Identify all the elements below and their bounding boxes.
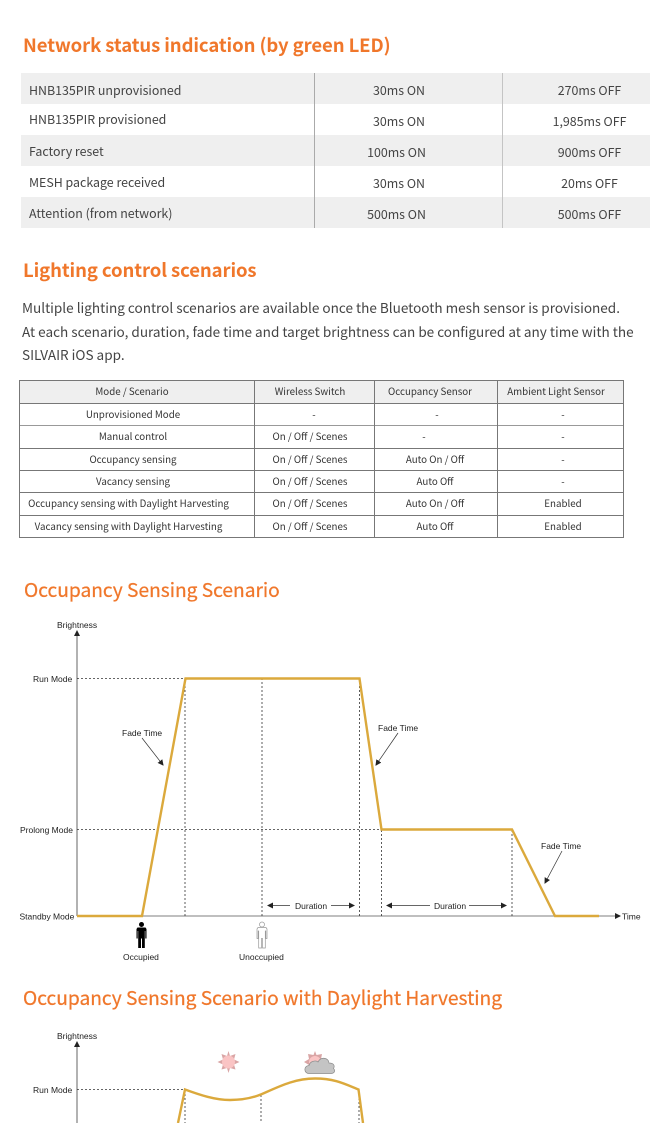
table: modes and scenarios: On / Off / Scenes <box>273 519 347 533</box>
axis labels <box>20 620 641 922</box>
table: modes and scenarios: Mode / Scenario <box>95 384 169 398</box>
table: network status indication: 100ms ON <box>367 143 426 161</box>
table: modes and scenarios: Occupancy sensing with Daylight Harvesting <box>28 496 229 510</box>
table: network status indication: Factory reset <box>29 142 104 160</box>
heading: network status: Network status indication (by green LED) <box>23 32 390 58</box>
fade time annotations <box>122 723 581 883</box>
table: network status indication <box>21 73 650 228</box>
table: modes and scenarios: On / Off / Scenes <box>273 474 347 488</box>
paragraph: scenarios description: Multiple lighting control scenarios are available once the Bluetooth mesh sensor is provisioned. <box>22 297 620 317</box>
chart: occupancy sensing scenario <box>20 620 641 962</box>
axis labels: Time <box>622 912 641 922</box>
table: network status indication: 30ms ON <box>373 112 425 130</box>
table: modes and scenarios: - <box>312 407 316 421</box>
table: network status indication: 1,985ms OFF <box>553 112 626 130</box>
brightness curve <box>77 678 599 916</box>
heading: daylight harvesting scenario: Occupancy Sensing Scenario with Daylight Harvesting <box>23 983 502 1011</box>
table: modes and scenarios: - <box>561 429 565 443</box>
icon: unoccupied person <box>239 922 284 962</box>
table: network status indication: 30ms ON <box>373 81 425 99</box>
table: modes and scenarios: Enabled <box>544 519 582 533</box>
paragraph: scenarios description: SILVAIR iOS app. <box>22 344 125 364</box>
table: modes and scenarios: Auto On / Off <box>406 452 464 466</box>
axis labels: Standby Mode <box>20 912 75 922</box>
table: modes and scenarios: - <box>561 407 565 421</box>
table: network status indication: 30ms ON <box>373 174 425 192</box>
table: modes and scenarios: On / Off / Scenes <box>273 429 347 443</box>
table: modes and scenarios <box>19 380 624 538</box>
heading: occupancy sensing scenario: Occupancy Sensing Scenario <box>24 575 280 603</box>
duration annotations: Duration <box>434 901 466 911</box>
table: modes and scenarios: Auto Off <box>417 519 453 533</box>
table: network status indication: Attention (from network) <box>29 204 172 222</box>
icon: unoccupied person: Unoccupied <box>239 952 284 962</box>
paragraph: scenarios description <box>22 297 634 364</box>
icon: occupied person <box>123 922 159 962</box>
axis labels: Brightness <box>57 1031 97 1041</box>
axis labels <box>33 1031 97 1095</box>
table: modes and scenarios: Manual control <box>99 429 167 443</box>
table: modes and scenarios: Wireless Switch <box>275 384 345 398</box>
table: modes and scenarios: Ambient Light Sensor <box>507 384 605 398</box>
axis labels: Run Mode <box>33 674 72 684</box>
heading: lighting control scenarios: Lighting control scenarios <box>23 257 256 283</box>
fade time annotations: Fade Time <box>378 723 418 733</box>
axis labels: Prolong Mode <box>20 825 73 835</box>
paragraph: scenarios description: At each scenario, duration, fade time and target brightness can be configured at any time with the <box>22 320 634 340</box>
table: modes and scenarios: Occupancy Sensor <box>388 384 472 398</box>
duration annotations <box>268 901 506 911</box>
axis labels: Brightness <box>57 620 97 630</box>
icon: sun behind cloud <box>304 1051 335 1074</box>
table: modes and scenarios: - <box>435 407 439 421</box>
table: modes and scenarios: - <box>422 429 426 443</box>
table: modes and scenarios: - <box>561 474 565 488</box>
axis labels: Run Mode <box>33 1085 72 1095</box>
table: modes and scenarios: - <box>561 452 565 466</box>
table: modes and scenarios: Vacancy sensing <box>96 474 170 488</box>
chart: daylight harvesting scenario <box>33 1031 364 1123</box>
table: modes and scenarios: Unprovisioned Mode <box>86 407 180 421</box>
duration annotations: Duration <box>295 901 327 911</box>
harvesting curve <box>178 1078 363 1123</box>
table: modes and scenarios: Auto Off <box>417 474 453 488</box>
table: modes and scenarios: Auto On / Off <box>406 496 464 510</box>
icon: occupied person: Occupied <box>123 952 159 962</box>
table: network status indication: 500ms ON <box>367 205 426 223</box>
table: network status indication: 270ms OFF <box>558 81 621 99</box>
table: modes and scenarios: On / Off / Scenes <box>273 452 347 466</box>
table: network status indication: MESH package received <box>29 173 165 191</box>
fade time annotations: Fade Time <box>122 728 162 738</box>
table: modes and scenarios: Vacancy sensing with Daylight Harvesting <box>35 519 222 533</box>
table: modes and scenarios: On / Off / Scenes <box>273 496 347 510</box>
icon: sun <box>218 1051 240 1073</box>
table: modes and scenarios: Enabled <box>544 496 582 510</box>
table: network status indication: HNB135PIR unprovisioned <box>29 81 181 99</box>
table: network status indication: 900ms OFF <box>558 143 621 161</box>
fade time annotations: Fade Time <box>541 841 581 851</box>
table: network status indication: 20ms OFF <box>561 174 618 192</box>
table: network status indication: HNB135PIR provisioned <box>29 110 166 128</box>
table: modes and scenarios: Occupancy sensing <box>89 452 177 466</box>
table: network status indication: 500ms OFF <box>558 205 621 223</box>
